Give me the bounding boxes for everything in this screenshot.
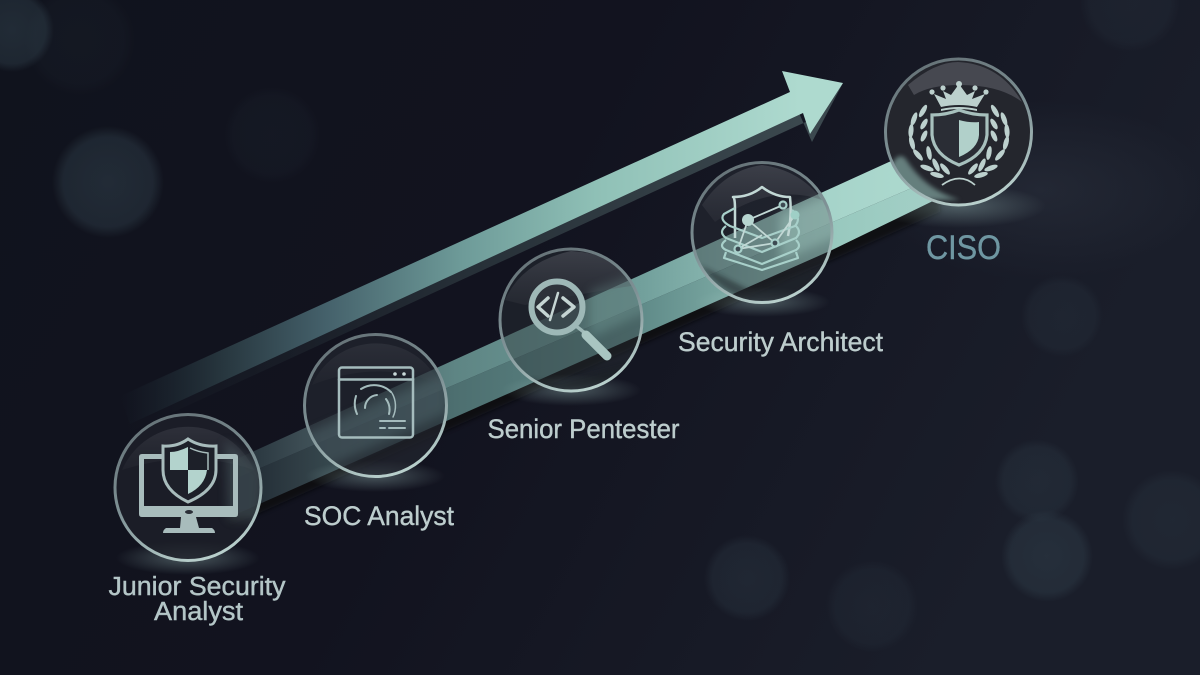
label: SOC Analyst: SOC Analyst: [304, 501, 455, 531]
step 5: CISO: [884, 58, 1034, 260]
icon: laurel wreath left: [908, 104, 975, 185]
label: Analyst second line: Analyst: [154, 598, 243, 626]
label: CISO: CISO: [926, 229, 1001, 267]
icon: browser window with radar: [339, 368, 413, 438]
glass lens 4: [691, 162, 840, 317]
glass lens 1: [114, 414, 265, 575]
icon: magnifier with code: [532, 282, 607, 356]
step 3: Senior Pentester: [488, 248, 680, 444]
step 2: SOC Analyst: [303, 334, 455, 531]
glass lens 3: [499, 248, 650, 406]
label: Security Architect: Security Architect: [678, 327, 884, 357]
icon: layered shield network: [722, 187, 800, 270]
icon: shield: [932, 110, 987, 165]
lower progress band: [230, 141, 940, 526]
icon: laurel wreath right: [967, 104, 1010, 179]
label: Junior Security Analyst: Junior Security: [108, 573, 286, 601]
step 1: Junior Security Analyst: [108, 414, 286, 601]
step 4: Security Architect: [678, 162, 884, 357]
upper growth arrow: [118, 71, 843, 432]
glass lens 5: [884, 58, 1034, 225]
glass lens 2: [303, 334, 448, 492]
icon: monitor with shield: [139, 439, 238, 533]
label: Senior Pentester: Senior Pentester: [488, 414, 680, 444]
icon: crown: [929, 81, 989, 111]
